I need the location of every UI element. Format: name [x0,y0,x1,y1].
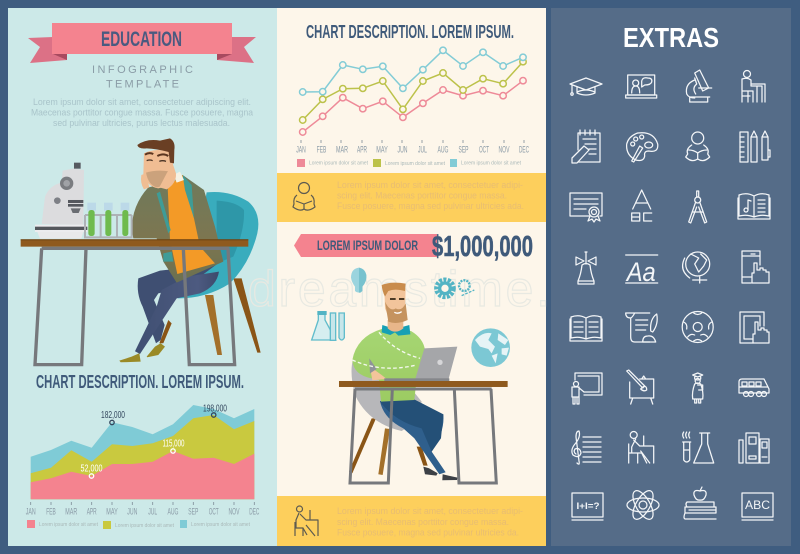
icon: seated student [295,506,318,536]
line chart: MAY [376,144,388,156]
panel: extras [551,8,791,546]
icon: test tube and flask [683,432,714,463]
icon: tablet with hand [740,312,769,343]
laptop [384,347,457,381]
area chart: JUL [148,506,157,518]
icon: globe [471,328,510,367]
subtitle: INFOGRAPHIC [92,64,193,76]
line chart legend: Lorem ipsum dolor sit amet [461,160,522,166]
intro text block: sed pulvinar ultricies, purus lectus malesuada. [53,118,230,128]
line chart: OCT [479,144,489,156]
area chart: 115,000 [162,438,185,450]
test tubes [85,203,132,238]
subtitle [92,64,193,90]
line chart: DEC [519,144,529,156]
icon: microscope [686,70,712,102]
icon: handwriting Aa: Aa [625,257,656,287]
callout text [337,506,523,538]
head [382,283,408,332]
area chart legend: Lorem ipsum dolor sit amet [39,522,99,528]
callout text [337,180,524,211]
line chart: APR [357,144,367,156]
pink tag: LOREM IPSUM DOLOR [317,237,418,253]
chart heading: CHART DESCRIPTION. LOREM IPSUM. [306,22,514,42]
line chart [296,47,529,156]
panel: middle [248,8,550,546]
icon: books on shelf [739,433,769,463]
line chart: AUG [438,144,448,156]
line chart: SEP [458,144,468,156]
panel: left education [8,8,277,546]
line chart legend: Lorem ipsum dolor sit amet [309,160,369,166]
icon: A B C [632,190,652,221]
area chart: MAR [65,506,77,518]
icon: easel and brush [627,370,654,404]
icon: scroll and quill [626,313,657,342]
intro text block [31,97,253,128]
area chart: SEP [188,506,198,518]
icon: certificate [570,193,602,222]
icon: music book [738,194,770,219]
subtitle: TEMPLATE [106,78,179,90]
band: first yellow callout [277,173,546,222]
icon: school bell [576,252,596,284]
callout text: scing elit. Maecenas porttitor congue massa. [337,517,509,527]
icon: open book [570,316,602,341]
icon: treble clef and staff [572,431,601,464]
area chart: MAY [106,506,118,518]
icon: reader [293,182,315,210]
callout text: Lorem ipsum dolor sit amet, consectetuer adipi- [337,506,523,516]
area chart: JAN [26,506,36,518]
chart heading: CHART DESCRIPTION. LOREM IPSUM. [36,372,244,392]
band: second yellow callout [277,496,546,546]
line chart: NOV [498,144,510,156]
icon: graduation cap [570,78,602,95]
icon: palette and brush [627,133,658,162]
area chart: APR [87,506,97,518]
icon: flask and tubes [312,311,344,340]
intro text block: Lorem ipsum dolor sit amet, consectetuer adipiscing elit. [33,97,251,107]
icon: math board: I+I=? [576,501,600,512]
icon: student at desk [629,432,654,463]
icon: ABC board [742,493,773,520]
table [339,381,508,483]
icon: ABC board: ABC [745,498,770,512]
extras heading: EXTRAS [623,22,719,53]
area chart [26,404,259,518]
series: blue [300,47,526,95]
shoes [423,467,458,480]
title ribbon: EDUCATION [101,28,182,51]
icon: teacher at board [572,373,602,404]
area chart: AUG [168,506,178,518]
line chart legend: Lorem ipsum dolor sit amet [385,161,446,167]
line chart: JUL [418,144,427,156]
area chart: 182,000 [101,410,125,421]
trousers [380,399,446,474]
icon: ruler and pencils [740,131,770,162]
icon: math board [572,493,603,520]
illustration: man at lab desk [21,138,261,365]
watermark: dreamstime. [248,261,550,317]
series: pink [300,78,526,135]
chair [349,358,428,475]
area chart: FEB [46,506,56,518]
torso [352,325,425,402]
icon: laptop with people [626,75,657,98]
icon: atom [627,488,659,522]
table [21,239,248,365]
area chart: 198,000 [203,404,227,414]
area chart: DEC [249,506,259,518]
area chart legend: Lorem ipsum dolor sit amet [191,522,251,528]
area chart: OCT [209,506,219,518]
icon: phone with hand [742,251,769,283]
title ribbon [28,23,256,63]
line chart: JUN [398,144,408,156]
icon: reader [686,132,710,161]
series: olive [300,58,526,123]
callout text: scing elit. Maecenas porttitor congue massa. [337,190,507,200]
line chart: JAN [296,144,306,156]
icon: books and apple [684,487,716,519]
icon: gears [436,280,474,297]
illustration: man with laptop [312,268,510,483]
pink tag [294,234,437,257]
callout text: Fusce posuere, magna sed pulvinar ultricies da. [337,528,519,538]
line chart: FEB [317,144,326,156]
intro text block: Maecenas porttitor congue massa. Fusce posuere, magna [31,108,253,118]
line chart: MAR [336,144,348,156]
callout text: Lorem ipsum dolor sit amet, consectetuer adipi- [337,180,523,190]
callout text: Fusce posuere, magna sed pulvinar ultricies ada. [337,201,524,211]
icon: seated student [742,70,765,102]
icon: desk globe [683,252,710,283]
icon: film reel [682,312,713,342]
area chart legend [27,520,251,529]
icon: drafting compass [689,191,707,223]
area chart legend: Lorem ipsum dolor sit amet [115,523,175,529]
amount: $1,000,000 [432,231,533,263]
icon: graduate [692,373,703,403]
area chart: 52,000 [80,464,103,474]
area chart: JUN [127,506,137,518]
icon: school bus [739,379,769,396]
line chart legend [297,159,522,167]
area chart: NOV [228,506,240,518]
icon: light bulb [351,268,366,293]
microscope [35,163,87,239]
icon: notepad and pencil [572,130,600,163]
